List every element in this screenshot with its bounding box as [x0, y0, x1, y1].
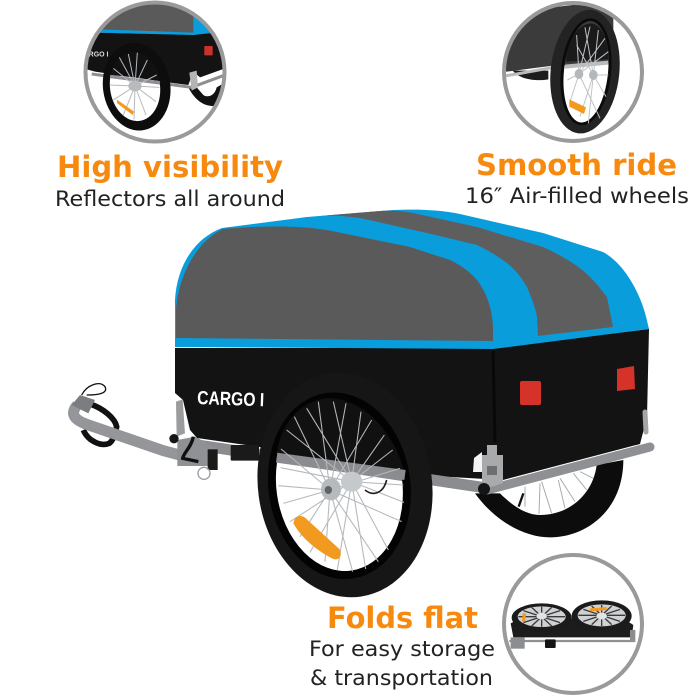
fender disc detail [513, 71, 548, 80]
wheel spokes [278, 402, 404, 572]
cotter pin [198, 467, 210, 479]
rear reflectors [520, 366, 635, 405]
body seen through wheel [277, 398, 404, 472]
knob [169, 434, 179, 443]
bracket detail [189, 71, 198, 91]
frame detail [92, 74, 225, 87]
reflector right [617, 366, 635, 391]
canopy detail [102, 4, 194, 33]
tyre detail [550, 10, 620, 134]
frame seen through wheel detail [110, 77, 160, 83]
far wheel [475, 460, 623, 537]
wheel spokes detail [110, 53, 159, 119]
label detail: RGO I [89, 51, 109, 58]
canopy grey panel left [176, 226, 493, 341]
drawbar end clamp [72, 395, 95, 413]
feature: high visibility [55, 0, 285, 211]
frame detail [504, 68, 552, 76]
frame block [231, 445, 259, 461]
bracket left [511, 637, 525, 649]
safety strap [83, 404, 117, 444]
subheading line 1: For easy storage [309, 637, 495, 661]
frame tubes [197, 412, 650, 490]
body detail [83, 32, 225, 85]
hub detail [575, 69, 598, 80]
canopy grey panel right [320, 211, 613, 336]
coupling plate [176, 399, 185, 437]
hub detail [128, 81, 142, 91]
connector [208, 449, 218, 470]
canopy blue base [175, 210, 649, 349]
wheel upper background [566, 23, 608, 62]
rim [261, 388, 418, 584]
body corner shading [493, 348, 495, 442]
far wheel detail [189, 84, 222, 106]
folded base [511, 618, 633, 637]
hub [321, 472, 387, 500]
front wheel [243, 361, 447, 609]
tyre [243, 361, 447, 609]
coupling box [177, 437, 217, 466]
canopy detail [504, 3, 613, 72]
wheel reflector detail [569, 99, 586, 114]
folded wheel left [512, 603, 572, 627]
reflector detail [204, 46, 213, 55]
folded wheel right [572, 600, 632, 626]
coupling strap [183, 437, 198, 462]
folded frame [509, 640, 636, 642]
detail circle: reflectors [83, 0, 227, 142]
brand label: CARGO I [197, 388, 265, 411]
bracket right [630, 630, 635, 640]
notch opening [473, 452, 482, 472]
body seen through wheel detail [110, 74, 138, 78]
subheading line 2: & transportation [310, 666, 493, 690]
tyre detail [102, 72, 171, 130]
heading: High visibility [57, 150, 283, 184]
cargo body [175, 329, 649, 480]
subheading: Reflectors all around [55, 187, 285, 211]
main product: cargo trailer [72, 210, 650, 609]
drawbar tube [74, 405, 181, 455]
heading: Smooth ride [476, 148, 677, 182]
wheel spokes detail [567, 27, 608, 123]
frame through wheel detail [565, 63, 608, 67]
wheel reflector [293, 516, 341, 559]
fold strap [545, 639, 556, 648]
reflector left [520, 381, 541, 405]
wheel reflector detail [117, 99, 134, 115]
subheading: 16″ Air-filled wheels [465, 184, 689, 208]
frame seen through wheel [277, 458, 405, 475]
feature: smooth ride [465, 3, 689, 208]
heading: Folds flat [327, 601, 478, 635]
rear bracket [478, 445, 503, 495]
strap ring [82, 384, 106, 395]
detail circle: wheel [504, 3, 642, 141]
drawbar hitch arm [72, 384, 259, 479]
canopy [175, 210, 649, 349]
feature: folds flat [309, 555, 642, 693]
detail circle: folded trailer [504, 555, 642, 693]
